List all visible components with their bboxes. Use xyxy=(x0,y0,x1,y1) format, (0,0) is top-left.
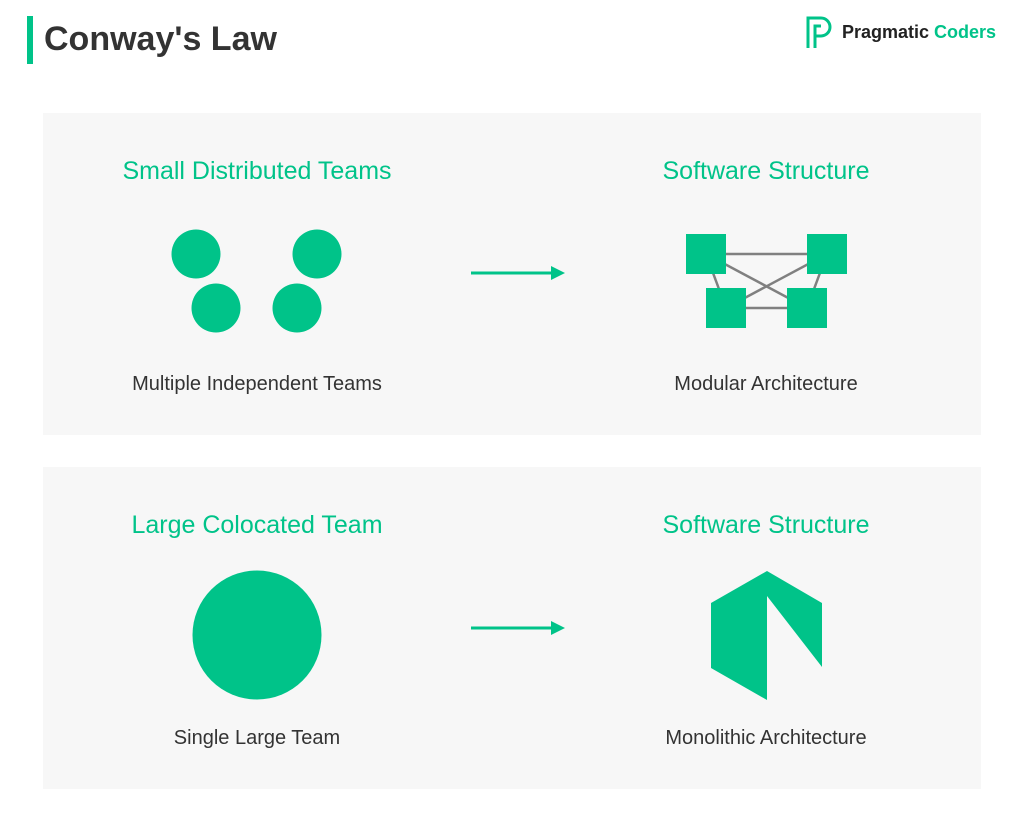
icon: large team circle xyxy=(192,570,322,700)
panel: small distributed teams xyxy=(43,113,981,435)
title: Conway's Law xyxy=(44,20,277,58)
caption: multiple independent teams: Multiple Independent Teams xyxy=(132,373,382,395)
icon: logo mark xyxy=(806,16,832,48)
icon: modular architecture xyxy=(686,234,847,328)
caption: modular architecture: Modular Architecture xyxy=(674,373,858,395)
panel: large colocated team xyxy=(43,467,981,789)
caption: monolithic architecture: Monolithic Architecture xyxy=(665,727,867,749)
heading: software structure: Software Structure xyxy=(662,511,870,539)
logo text: Pragmatic Coders xyxy=(842,22,996,42)
icon: monolithic architecture xyxy=(711,571,822,700)
logo xyxy=(806,16,996,48)
heading: software structure: Software Structure xyxy=(662,157,870,185)
heading: small distributed teams: Small Distributed Teams xyxy=(122,157,392,185)
caption: single large team: Single Large Team xyxy=(174,727,340,749)
icon: four team circles xyxy=(172,230,342,332)
arrow xyxy=(471,266,565,280)
title bar accent xyxy=(27,16,33,64)
heading: large colocated team: Large Colocated Team xyxy=(131,511,383,539)
arrow xyxy=(471,621,565,635)
